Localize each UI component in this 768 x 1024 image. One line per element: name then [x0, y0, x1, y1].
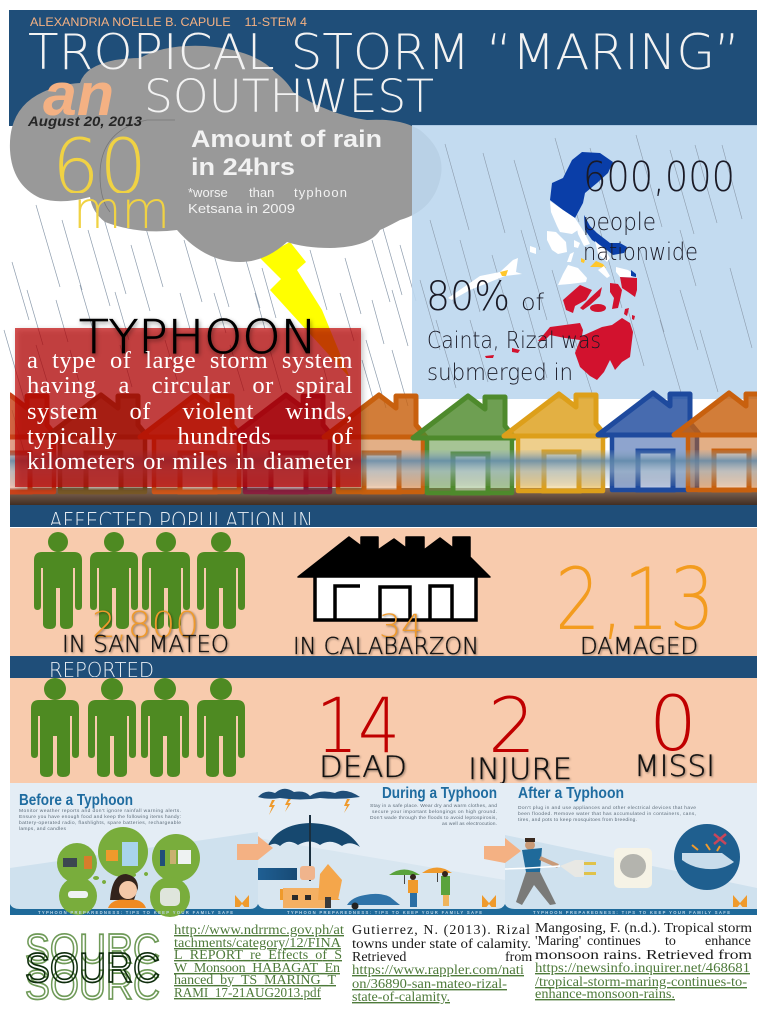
header banner	[9, 10, 757, 126]
stat: 0 missing: MISSI	[634, 749, 715, 783]
heading: sources: SOURC	[25, 925, 160, 972]
typhoon definition text: kilometers or miles in diameter	[27, 448, 353, 475]
typhoon definition text: system of violent winds,	[27, 398, 353, 425]
stat: 0 missing: 0	[649, 679, 697, 768]
rain amount note: typhoon	[294, 185, 347, 200]
heading: sources	[25, 925, 160, 1008]
rain lines over map panel	[420, 135, 752, 396]
word: an: an	[43, 61, 114, 128]
strip footer captions	[38, 910, 730, 915]
rain amount heading	[191, 126, 382, 181]
strip footer captions: TYPHOON PREPAREDNESS: TIPS TO KEEP YOUR FAMILY SAFE	[38, 910, 233, 915]
typhoon definition text: having a circular or spiral	[27, 372, 353, 399]
source 2 citation: state-of-calamity.	[352, 990, 450, 1005]
mud ground	[10, 488, 757, 506]
row of flooded houses	[0, 393, 768, 493]
source 3 citation	[535, 921, 752, 1002]
section: before a typhoon: Before a Typhoon	[19, 792, 133, 809]
source 2 citation: https://www.rappler.com/nati	[352, 963, 524, 978]
panel: reported casualties	[10, 678, 757, 783]
stat: 34: 34	[379, 607, 423, 645]
icon: four people affected	[34, 532, 245, 629]
stat: 80% of Cainta	[426, 274, 601, 386]
source 3 citation: to	[665, 934, 676, 949]
stat: 600,000 people nationwide: 600,000	[583, 153, 735, 201]
panel: typhoon preparedness strip	[10, 783, 757, 915]
source 2 citation	[352, 923, 532, 1005]
source 2 citation: from	[505, 950, 532, 965]
source 1 link	[174, 923, 344, 1001]
panel: typhoon definition	[15, 328, 361, 487]
source 3 citation: /tropical-storm-maring-continues-to-	[535, 975, 747, 990]
section: before a typhoon: Ensure you have enough food and keep the following items handy:	[19, 814, 181, 820]
source 3 citation: Mangosing, F. (n.d.). Tropical storm	[535, 921, 752, 936]
stat: 80% of Cainta: 80%	[426, 274, 510, 320]
section: before a typhoon	[19, 792, 249, 917]
section: before a typhoon: battery-operated radio, flashlights, spare batteries, rechargeable	[19, 820, 181, 826]
rain cloud	[10, 46, 442, 262]
source 2 citation: towns under state of calamity.	[352, 937, 531, 952]
stat: 80% of Cainta: Cainta, Rizal was	[427, 328, 601, 354]
band label: reported: REPORTED	[49, 658, 154, 682]
typhoon definition text	[27, 347, 353, 475]
rain amount heading: Amount of rain	[191, 126, 382, 153]
unit: mm: mm	[73, 181, 170, 241]
label: in Calabarzon: IN CALABARZON	[293, 634, 479, 660]
label: damaged: DAMAGED	[580, 634, 698, 660]
title line 1: TROPICAL STORM “MARING”	[28, 24, 740, 81]
source 3 citation: continues	[587, 934, 641, 949]
section: after a typhoon: tires, and pots to keep mosquitoes from breeding.	[518, 817, 637, 823]
stat: 80% of Cainta: submerged in	[427, 360, 573, 386]
stat: 2,13: 2,13	[555, 550, 715, 650]
section: during a typhoon	[258, 785, 497, 910]
source 1 link: tachments/category/12/FINA	[174, 936, 342, 951]
source 3 citation: enhance-monsoon-rains.	[535, 987, 675, 1002]
stat: 600,000 people nationwide: nationwide	[583, 238, 698, 266]
source 3 citation: https://newsinfo.inquirer.net/468681	[535, 961, 750, 976]
source 1 link: hanced_by_TS_MARING_T	[174, 973, 336, 988]
strip footer captions: TYPHOON PREPAREDNESS: TIPS TO KEEP YOUR FAMILY SAFE	[533, 910, 730, 915]
source 1 link: L_REPORT_re_Effects_of_S	[174, 948, 342, 963]
section: during a typhoon: Don't wade through the floods to avoid leptospirosis,	[370, 815, 497, 821]
rain amount note: *worse	[188, 185, 228, 200]
section: during a typhoon: During a Typhoon	[382, 785, 497, 802]
band label: affected population: AFFECTED POPULATION IN	[49, 509, 313, 535]
stat: 2,800: 2,800	[92, 605, 199, 646]
rain lines	[4, 205, 416, 472]
icon: Philippines flag map	[448, 152, 637, 380]
section: during a typhoon: secure your important belongings on high ground.	[372, 809, 497, 815]
band: reported	[10, 656, 757, 678]
source 2 citation: Gutierrez, N. (2013). Rizal	[352, 923, 530, 938]
stat: 14 dead: 14	[316, 681, 400, 770]
source 2 citation: Retrieved	[352, 950, 406, 965]
label: in San Mateo: IN SAN MATEO	[62, 632, 229, 658]
rain amount heading: in 24hrs	[191, 154, 295, 181]
stat: 60: 60	[52, 122, 147, 211]
date: August 20, 2013	[27, 114, 143, 129]
band: affected population	[10, 505, 757, 527]
stat: 14 dead: DEAD	[319, 750, 407, 784]
rain amount note	[188, 185, 347, 216]
section: after a typhoon: been flooded. Remove water that has accumulated in containers, cans,	[518, 811, 696, 817]
icon: house	[298, 537, 490, 620]
stat: 2 injured: 2	[488, 681, 536, 770]
rain amount note: Ketsana in 2009	[188, 201, 295, 216]
strip footer captions: TYPHOON PREPAREDNESS: TIPS TO KEEP YOUR FAMILY SAFE	[287, 910, 482, 915]
source 3 citation: enhance	[705, 934, 751, 949]
stat: 80% of Cainta: of	[521, 290, 545, 316]
section: after a typhoon	[505, 785, 747, 907]
stat: 0 missing	[634, 679, 715, 783]
section: before a typhoon: lamps, and candles	[19, 826, 67, 832]
section: during a typhoon: as well as electrocution.	[442, 821, 497, 827]
heading: typhoon: TYPHOON	[79, 310, 317, 364]
section: before a typhoon: Monitor weather reports and don't ignore rainfall warning alerts.	[19, 808, 181, 814]
source 3 citation: 'Maring'	[535, 934, 581, 949]
stat: 600,000 people nationwide	[583, 153, 735, 266]
source 3 citation: monsoon rains. Retrieved from	[535, 948, 752, 963]
lightning bolt	[260, 242, 350, 378]
source 1 link: W_Monsoon_HABAGAT_En	[174, 961, 340, 976]
heading: sources: SOURC	[25, 961, 160, 1008]
stat: 600,000 people nationwide: people	[583, 208, 656, 236]
rain amount note: than	[249, 185, 274, 200]
panel: affected stats	[10, 528, 757, 656]
source 1 link: RAMI_17-21AUG2013.pdf	[174, 986, 321, 1001]
source 1 link: http://www.ndrrmc.gov.ph/at	[174, 923, 344, 938]
panel: map	[412, 125, 757, 399]
stat: 2 injured	[468, 681, 572, 786]
author line: ALEXANDRIA NOELLE B. CAPULE 11-STEM 4	[30, 17, 308, 29]
title line 2: SOUTHWEST	[144, 70, 434, 123]
heading: sources: SOURC	[25, 944, 160, 991]
cloud thin callout arc	[100, 120, 175, 212]
icon: four people reported	[31, 678, 245, 777]
section: during a typhoon: Stay in a safe place. Wear dry and warm clothes, and	[370, 803, 497, 809]
section: after a typhoon: Don't plug in and use appliances and other electrical devices that have	[518, 805, 696, 811]
section: after a typhoon: After a Typhoon	[518, 785, 624, 802]
stat: 2 injured: INJURE	[468, 752, 572, 786]
flood water	[10, 450, 757, 486]
arrow: before to during	[237, 836, 273, 860]
arrow: during to after	[484, 838, 521, 863]
source 2 citation: on/36890-san-mateo-rizal-	[352, 977, 507, 992]
typhoon definition text: typically hundreds of	[27, 423, 353, 450]
typhoon definition text: a type of large storm system	[27, 347, 353, 374]
